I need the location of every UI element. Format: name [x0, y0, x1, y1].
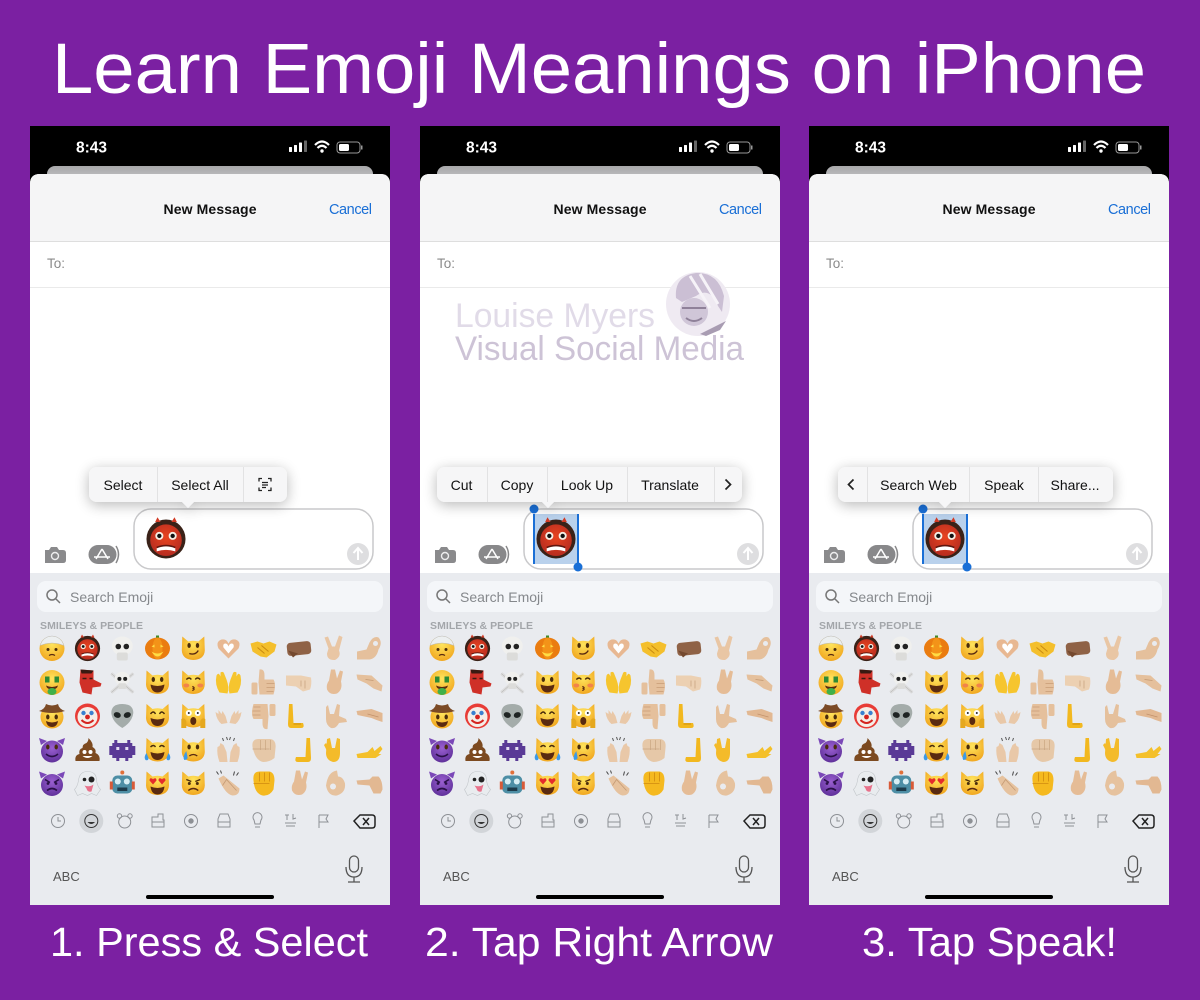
emoji keyboard: ABC: [832, 869, 859, 884]
emoji keyboard: Search Emoji: [460, 589, 543, 605]
watermark: Louise Myers Visual Social Media: [455, 272, 744, 368]
status bar: 8:43: [76, 140, 107, 156]
emoji keyboard: ABC: [53, 869, 80, 884]
heading: new message bar: Cancel: [1108, 202, 1151, 218]
arrow: right: [726, 480, 730, 490]
emoji keyboard: ABC: [443, 869, 470, 884]
popup menu: cut, copy, look up, translate: Look Up: [561, 477, 613, 493]
heading: new message bar: [164, 201, 372, 218]
heading: new message bar: New Message: [164, 201, 257, 217]
popup menu: select, select all, scan: Select: [104, 477, 143, 493]
popup menu: search web, speak, share: Speak: [984, 477, 1025, 493]
icon: camera: [435, 547, 456, 563]
message input with selected emoji: [524, 504, 763, 572]
heading: new message bar: New Message: [554, 201, 647, 217]
portrait: [666, 272, 730, 336]
icon: app store: [478, 545, 508, 564]
title: Learn Emoji Meanings on iPhone: [52, 30, 1146, 109]
status bar: [855, 140, 1142, 156]
arrow: left: [848, 480, 854, 490]
status bar: 8:43: [855, 140, 886, 156]
heading: new message bar: [942, 201, 1151, 218]
popup menu: search web, speak, share: Share...: [1050, 477, 1100, 493]
caption: step 2: 2. Tap Right Arrow: [425, 919, 773, 965]
emoji keyboard: SMILEYS & PEOPLE: [819, 620, 922, 632]
popup menu: cut, copy, look up, translate: Translate: [641, 477, 699, 493]
heading: new message bar: [554, 201, 762, 218]
caption: step 3: 3. Tap Speak!: [862, 919, 1117, 965]
icon: camera: [824, 547, 845, 563]
icon: app store: [88, 545, 118, 564]
emoji keyboard: [30, 573, 390, 905]
message input with selected emoji: [913, 504, 1152, 572]
emoji keyboard: [809, 573, 1169, 905]
popup menu: cut, copy, look up, translate: [437, 467, 742, 508]
panel: phone screenshot 1, press and select: [30, 126, 390, 905]
watermark: Louise Myers Visual Social Media: Louise Myers: [455, 297, 655, 335]
emoji keyboard: Search Emoji: [70, 589, 153, 605]
caption: step 1: 1. Press & Select: [50, 919, 369, 965]
emoji keyboard: SMILEYS & PEOPLE: [430, 620, 533, 632]
message input with emoji: [134, 509, 373, 569]
panel: phone screenshot 3, tap speak: [809, 126, 1169, 905]
recipient field: To:: [826, 256, 844, 271]
status bar: [76, 140, 362, 156]
popup menu: select, select all, scan: Select All: [171, 477, 229, 493]
recipient field: To:: [47, 256, 65, 271]
heading: new message bar: New Message: [942, 201, 1036, 217]
popup menu: search web, speak, share: [838, 467, 1113, 508]
popup menu: search web, speak, share: Search Web: [880, 477, 957, 493]
watermark: Louise Myers Visual Social Media: Visual Social Media: [455, 330, 744, 368]
heading: new message bar: Cancel: [329, 202, 372, 218]
icon: app store: [868, 545, 898, 564]
status bar: [466, 140, 752, 156]
status bar: 8:43: [466, 140, 497, 156]
popup menu: select, select all, scan: [89, 467, 287, 508]
popup menu: cut, copy, look up, translate: Copy: [501, 477, 533, 493]
emoji keyboard: [420, 573, 780, 905]
popup menu: cut, copy, look up, translate: Cut: [451, 477, 472, 493]
panel: phone screenshot 2, tap right arrow: [420, 126, 780, 905]
recipient field: To:: [437, 256, 455, 271]
emoji keyboard: Search Emoji: [849, 589, 932, 605]
icon: camera: [45, 547, 66, 563]
heading: new message bar: Cancel: [719, 202, 762, 218]
emoji keyboard: SMILEYS & PEOPLE: [40, 620, 143, 632]
